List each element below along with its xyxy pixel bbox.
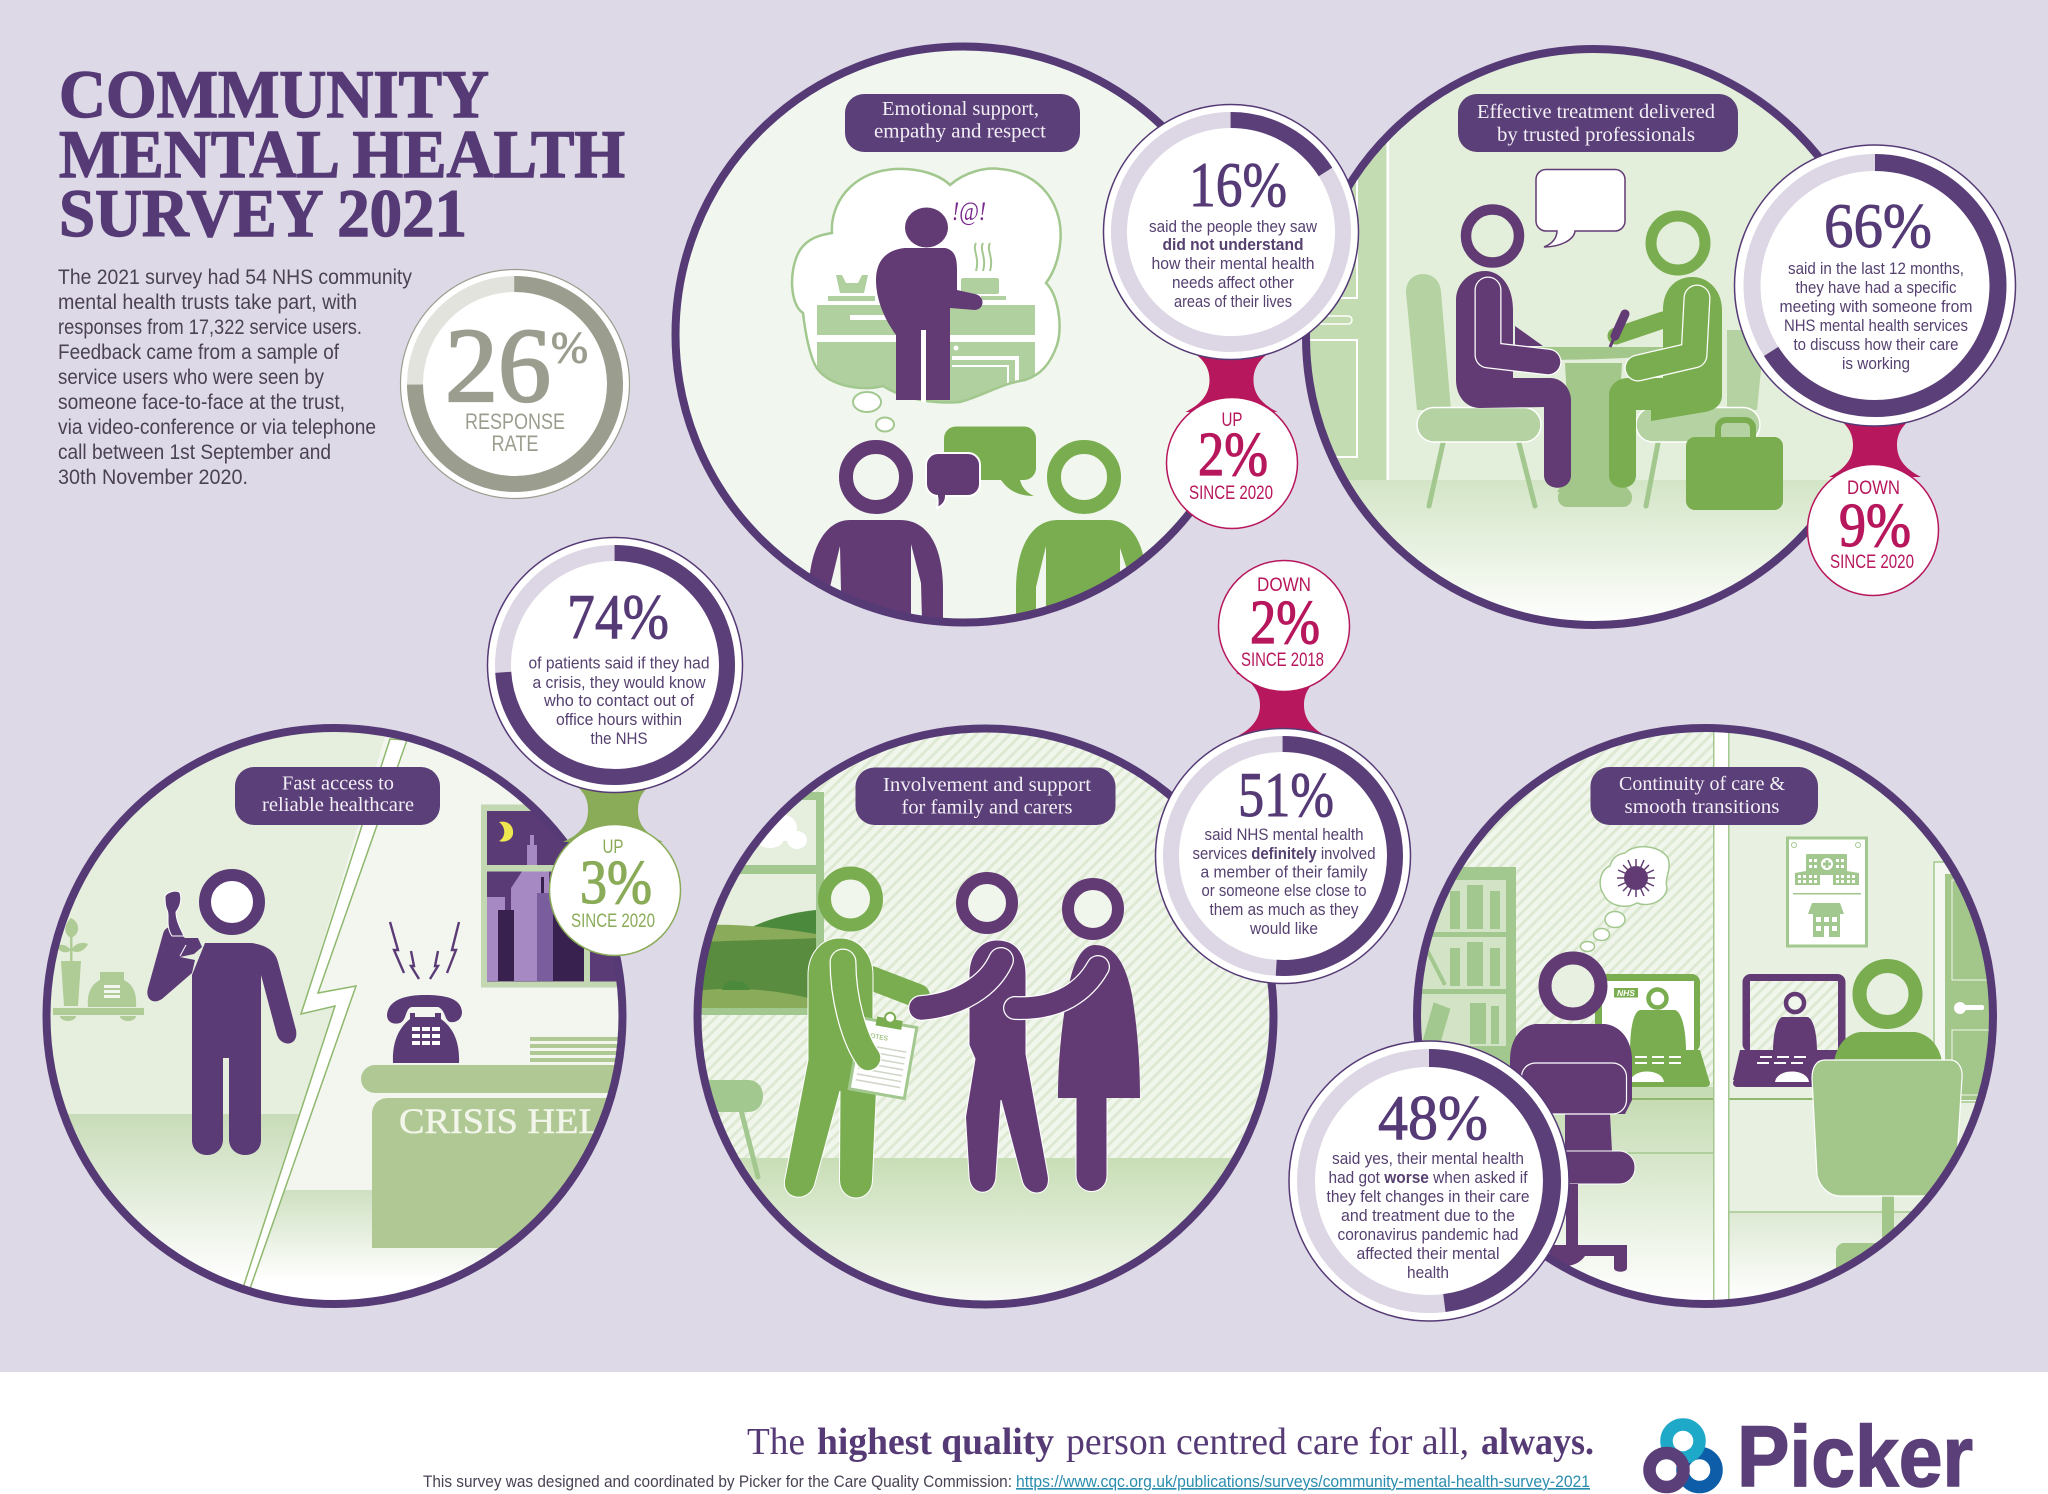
change badge: up 3% since 2020 xyxy=(550,824,680,956)
change badge: down 9% since 2020: SINCE 2020 xyxy=(1830,552,1914,573)
purple clinician xyxy=(1456,210,1571,488)
stat: 48%: health xyxy=(1407,1263,1449,1282)
intro text block: someone face-to-face at the trust, xyxy=(58,391,345,414)
exclamation symbols: !@! xyxy=(952,197,986,226)
tagline: The xyxy=(747,1421,805,1463)
stat: 74%: of patients said if they had xyxy=(528,654,710,672)
connector: 66% to down 9% xyxy=(1829,413,1921,477)
tagline xyxy=(747,1421,1594,1463)
window with hills xyxy=(690,792,824,1015)
response rate badge xyxy=(400,270,630,498)
stat: 74%: a crisis, they would know xyxy=(532,673,706,692)
stat: 66%: meeting with someone from xyxy=(1780,297,1972,316)
table xyxy=(1536,347,1663,507)
stat: 48%: coronavirus pandemic had xyxy=(1338,1225,1518,1244)
stat: 48%: 48% xyxy=(1378,1082,1488,1153)
change badge: up 3% since 2020: 3% xyxy=(580,849,652,917)
heading pill: emotional support: Emotional support, xyxy=(882,98,1039,120)
stat: 48% xyxy=(1289,1041,1569,1321)
figure at kitchen counter xyxy=(876,208,982,402)
connector: 74% to up 3% xyxy=(563,778,663,842)
empty speech bubble xyxy=(1536,170,1625,247)
stat: 66%: 66% xyxy=(1824,190,1932,261)
intro text block: via video-conference or via telephone xyxy=(58,416,376,439)
tagline: highest quality xyxy=(817,1421,1054,1463)
change badge: down 9% since 2020: DOWN xyxy=(1847,478,1900,499)
stat: 16%: areas of their lives xyxy=(1174,292,1292,311)
stat: 74%: the NHS xyxy=(590,729,648,748)
green person xyxy=(1016,440,1143,614)
purple figure shaking hands xyxy=(921,878,1048,1193)
shelf with plant and phone xyxy=(53,918,144,1021)
poster with hospital and house xyxy=(1788,838,1866,946)
stat: 51%: 51% xyxy=(1238,759,1334,830)
stat: 16%: said the people they saw xyxy=(1149,217,1318,236)
stat: 48%: affected their mental xyxy=(1356,1244,1500,1263)
panel: emotional support xyxy=(676,46,1252,640)
connector: 51% to down 2% xyxy=(1236,673,1328,737)
stat: 66%: is working xyxy=(1842,354,1910,373)
stat: 51%: services definitely involved xyxy=(1192,844,1376,863)
change badge: down 9% since 2020 xyxy=(1808,464,1938,596)
heading pill: fast access: Fast access to xyxy=(282,772,394,794)
stat: 74%: office hours within xyxy=(556,710,682,729)
door and floor xyxy=(1310,140,1830,621)
footer band xyxy=(0,1372,2048,1494)
desk with crisis help sign xyxy=(361,1037,618,1248)
stat: 66%: to discuss how their care xyxy=(1794,335,1958,354)
heading pill: involvement: Involvement and support xyxy=(883,774,1091,796)
connector: 16% to up 2% xyxy=(1186,348,1278,412)
stat: 74%: 74% xyxy=(567,581,669,652)
change badge: down 2% since 2018: SINCE 2018 xyxy=(1241,650,1324,671)
panel: involvement xyxy=(690,728,1290,1308)
purple seated person xyxy=(1510,958,1635,1272)
heading pill: involvement xyxy=(856,768,1116,825)
stat: 16%: did not understand xyxy=(1162,235,1304,254)
stat: 48%: they felt changes in their care xyxy=(1326,1187,1530,1206)
title: SURVEY 2021 xyxy=(59,175,467,251)
stat: 51%: them as much as they xyxy=(1210,900,1359,919)
panel: fast access xyxy=(40,720,651,1310)
heading pill: continuity: Continuity of care & xyxy=(1619,773,1785,795)
change badge: up 3% since 2020: SINCE 2020 xyxy=(571,911,655,932)
change badge: down 2% since 2018: 2% xyxy=(1250,589,1320,657)
title xyxy=(59,56,625,251)
response rate badge: RESPONSE xyxy=(465,409,565,434)
green figure with clipboard: NOTES xyxy=(865,1032,889,1043)
stat: 66%: said in the last 12 months, xyxy=(1788,259,1964,278)
intro text block: Feedback came from a sample of xyxy=(58,341,339,364)
intro text block: call between 1st September and xyxy=(58,441,331,464)
room backgrounds, floors and crack xyxy=(50,732,466,1300)
panel: effective treatment xyxy=(1302,45,1853,629)
response rate badge: 26 xyxy=(445,307,551,424)
laptop on green desk xyxy=(1590,974,1710,1087)
chair xyxy=(708,1080,763,1180)
stat: 51%: said NHS mental health xyxy=(1204,825,1364,844)
intro text block: mental health trusts take part, with xyxy=(58,291,357,314)
stat: 51%: or someone else close to xyxy=(1202,881,1366,900)
thought cloud with virus xyxy=(1580,847,1669,952)
door xyxy=(1933,861,1989,1103)
heading pill: fast access xyxy=(235,767,440,825)
intro text block: The 2021 survey had 54 NHS community xyxy=(58,266,412,289)
stat: 51%: a member of their family xyxy=(1200,862,1368,882)
title: COMMUNITY xyxy=(59,56,489,132)
Picker logo xyxy=(1650,1409,1973,1494)
briefcase xyxy=(1686,420,1783,510)
stat: 74%: who to contact out of xyxy=(543,691,694,710)
floor xyxy=(739,1158,1232,1300)
bookshelf xyxy=(1421,867,1516,1066)
stat: 16% xyxy=(1104,104,1358,360)
change badge: down 2% since 2018 xyxy=(1218,560,1350,692)
speech bubbles xyxy=(926,426,1036,508)
thought bubbles xyxy=(853,392,894,432)
stat: 51%: would like xyxy=(1249,919,1318,938)
credit line: https://www.cqc.org.uk/publications/surveys/community-mental-health-survey-2021 xyxy=(1016,1473,1590,1491)
night window xyxy=(481,804,631,988)
heading pill: fast access: reliable healthcare xyxy=(262,794,414,816)
stat: 74% xyxy=(488,538,742,792)
stat: 66%: NHS mental health services xyxy=(1784,316,1968,335)
credit line xyxy=(423,1473,1590,1491)
change badge: down 2% since 2018: DOWN xyxy=(1257,575,1311,596)
stat: 48%: and treatment due to the xyxy=(1341,1206,1515,1225)
intro text block xyxy=(58,266,412,489)
change badge: up 2% since 2020: 2% xyxy=(1198,421,1268,489)
stat: 66%: they have had a specific xyxy=(1796,278,1957,297)
response rate badge: % xyxy=(551,323,588,372)
panel: continuity xyxy=(1410,720,2008,1313)
stat: 16%: how their mental health xyxy=(1152,254,1314,273)
change badge: up 2% since 2020 xyxy=(1166,398,1298,528)
heading pill: continuity: smooth transitions xyxy=(1624,796,1780,818)
credit line: This survey was designed and coordinated by Picker for the Care Quality Commission: xyxy=(423,1473,1012,1491)
change badge: up 3% since 2020: UP xyxy=(602,837,624,858)
laptop on green desk: NHS xyxy=(1617,988,1635,998)
intro text block: 30th November 2020. xyxy=(58,466,248,489)
stat: 66% xyxy=(1734,145,2016,426)
change badge: up 2% since 2020: UP xyxy=(1222,410,1242,431)
tagline: person centred care for all, xyxy=(1066,1421,1469,1463)
chairs xyxy=(1406,274,1765,506)
green seated person xyxy=(1812,966,1962,1313)
green figure with clipboard xyxy=(784,873,919,1198)
response rate badge: RATE xyxy=(492,431,538,456)
thought cloud with kitchen scene xyxy=(792,169,1061,404)
heading pill: emotional support xyxy=(845,94,1080,152)
green service user xyxy=(1609,216,1722,488)
stat: 16%: 16% xyxy=(1189,149,1287,220)
desk with crisis help sign: CRISIS HELP xyxy=(399,1101,623,1141)
heading pill: effective treatment xyxy=(1458,94,1738,152)
change badge: up 2% since 2020: SINCE 2020 xyxy=(1189,483,1273,504)
purple person xyxy=(809,447,943,640)
ringing telephone xyxy=(387,922,462,1063)
purple laptop xyxy=(1733,974,1846,1087)
stat: 16%: needs affect other xyxy=(1172,273,1294,292)
tagline: always. xyxy=(1481,1421,1594,1463)
heading pill: effective treatment: by trusted professionals xyxy=(1497,124,1695,146)
title: MENTAL HEALTH xyxy=(59,116,625,192)
stat: 51% xyxy=(1156,728,1410,984)
stat: 48%: had got worse when asked if xyxy=(1328,1168,1528,1187)
purple figure in dress xyxy=(1015,884,1140,1192)
heading pill: involvement: for family and carers xyxy=(902,796,1073,818)
heading pill: continuity xyxy=(1590,767,1818,825)
intro text block: responses from 17,322 service users. xyxy=(58,316,362,339)
heading pill: emotional support: empathy and respect xyxy=(874,120,1046,142)
intro text block: service users who were seen by xyxy=(58,366,324,389)
change badge: down 9% since 2020: 9% xyxy=(1839,492,1911,560)
stat: 48%: said yes, their mental health xyxy=(1332,1149,1524,1168)
heading pill: effective treatment: Effective treatment delivered xyxy=(1477,101,1715,123)
man on phone xyxy=(147,875,296,1155)
room backgrounds xyxy=(1464,732,1912,1300)
